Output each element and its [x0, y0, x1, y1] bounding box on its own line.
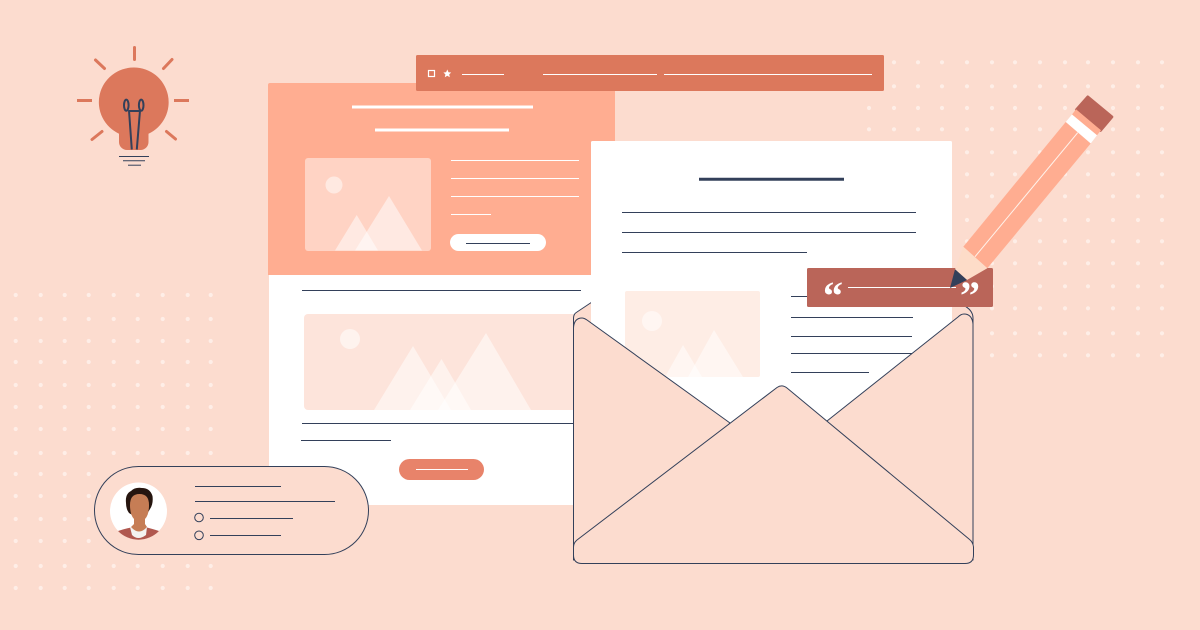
panel header: [268, 83, 615, 275]
avatar shoulders: [118, 527, 159, 540]
pencil body: [963, 122, 1091, 268]
icon: light bulb: [77, 48, 189, 165]
envelope front: [574, 386, 974, 564]
pencil graphite: [950, 269, 967, 288]
pencil eraser: [1076, 97, 1112, 130]
envelope right flap: [827, 314, 973, 560]
quote bar: [807, 268, 993, 318]
pencil wood tip: [955, 247, 987, 280]
pencil band: [1072, 109, 1101, 135]
bulb filament: [124, 100, 144, 150]
bulb rays: [77, 48, 189, 140]
envelope: [574, 314, 974, 564]
card: user profile: [94, 466, 368, 554]
header button: [450, 234, 546, 251]
bulb body: [99, 67, 169, 150]
toolbar lines: [462, 74, 872, 76]
toolbar star icon: [443, 70, 451, 77]
body text line: [302, 290, 581, 292]
avatar: [110, 482, 167, 540]
card text lines: [195, 486, 335, 536]
icon: pencil: [950, 97, 1112, 288]
avatar shirt: [130, 527, 147, 538]
panel body: [269, 270, 599, 505]
dot pattern: right: [867, 60, 1164, 357]
panel: letter document: [591, 141, 952, 441]
header image: [305, 158, 431, 251]
envelope back flap: [574, 190, 973, 350]
opening quote mark: “: [823, 273, 843, 318]
header title lines: [352, 107, 533, 130]
card outline: [94, 466, 368, 554]
header text lines: [451, 160, 579, 214]
toolbar: [416, 55, 884, 91]
document side text lines: [791, 296, 913, 372]
document image: [625, 291, 760, 377]
panel: newsletter page: [268, 83, 615, 505]
avatar hair: [126, 488, 153, 516]
dot pattern: left: [14, 293, 213, 590]
avatar neck: [131, 515, 147, 532]
bulb base lines: [119, 156, 149, 165]
closing quote mark: ”: [960, 273, 980, 318]
pencil highlight: [975, 133, 1078, 257]
pencil white band: [1066, 114, 1097, 144]
card radio icons: [195, 513, 203, 540]
document title: [699, 178, 844, 181]
body button: [399, 459, 484, 480]
body text lines: [301, 424, 580, 440]
avatar face: [130, 494, 149, 521]
toolbar square icon: [428, 70, 434, 76]
body image: [304, 314, 594, 410]
envelope left flap: [574, 318, 730, 560]
document text lines: [622, 212, 916, 252]
quote line: [848, 286, 956, 288]
